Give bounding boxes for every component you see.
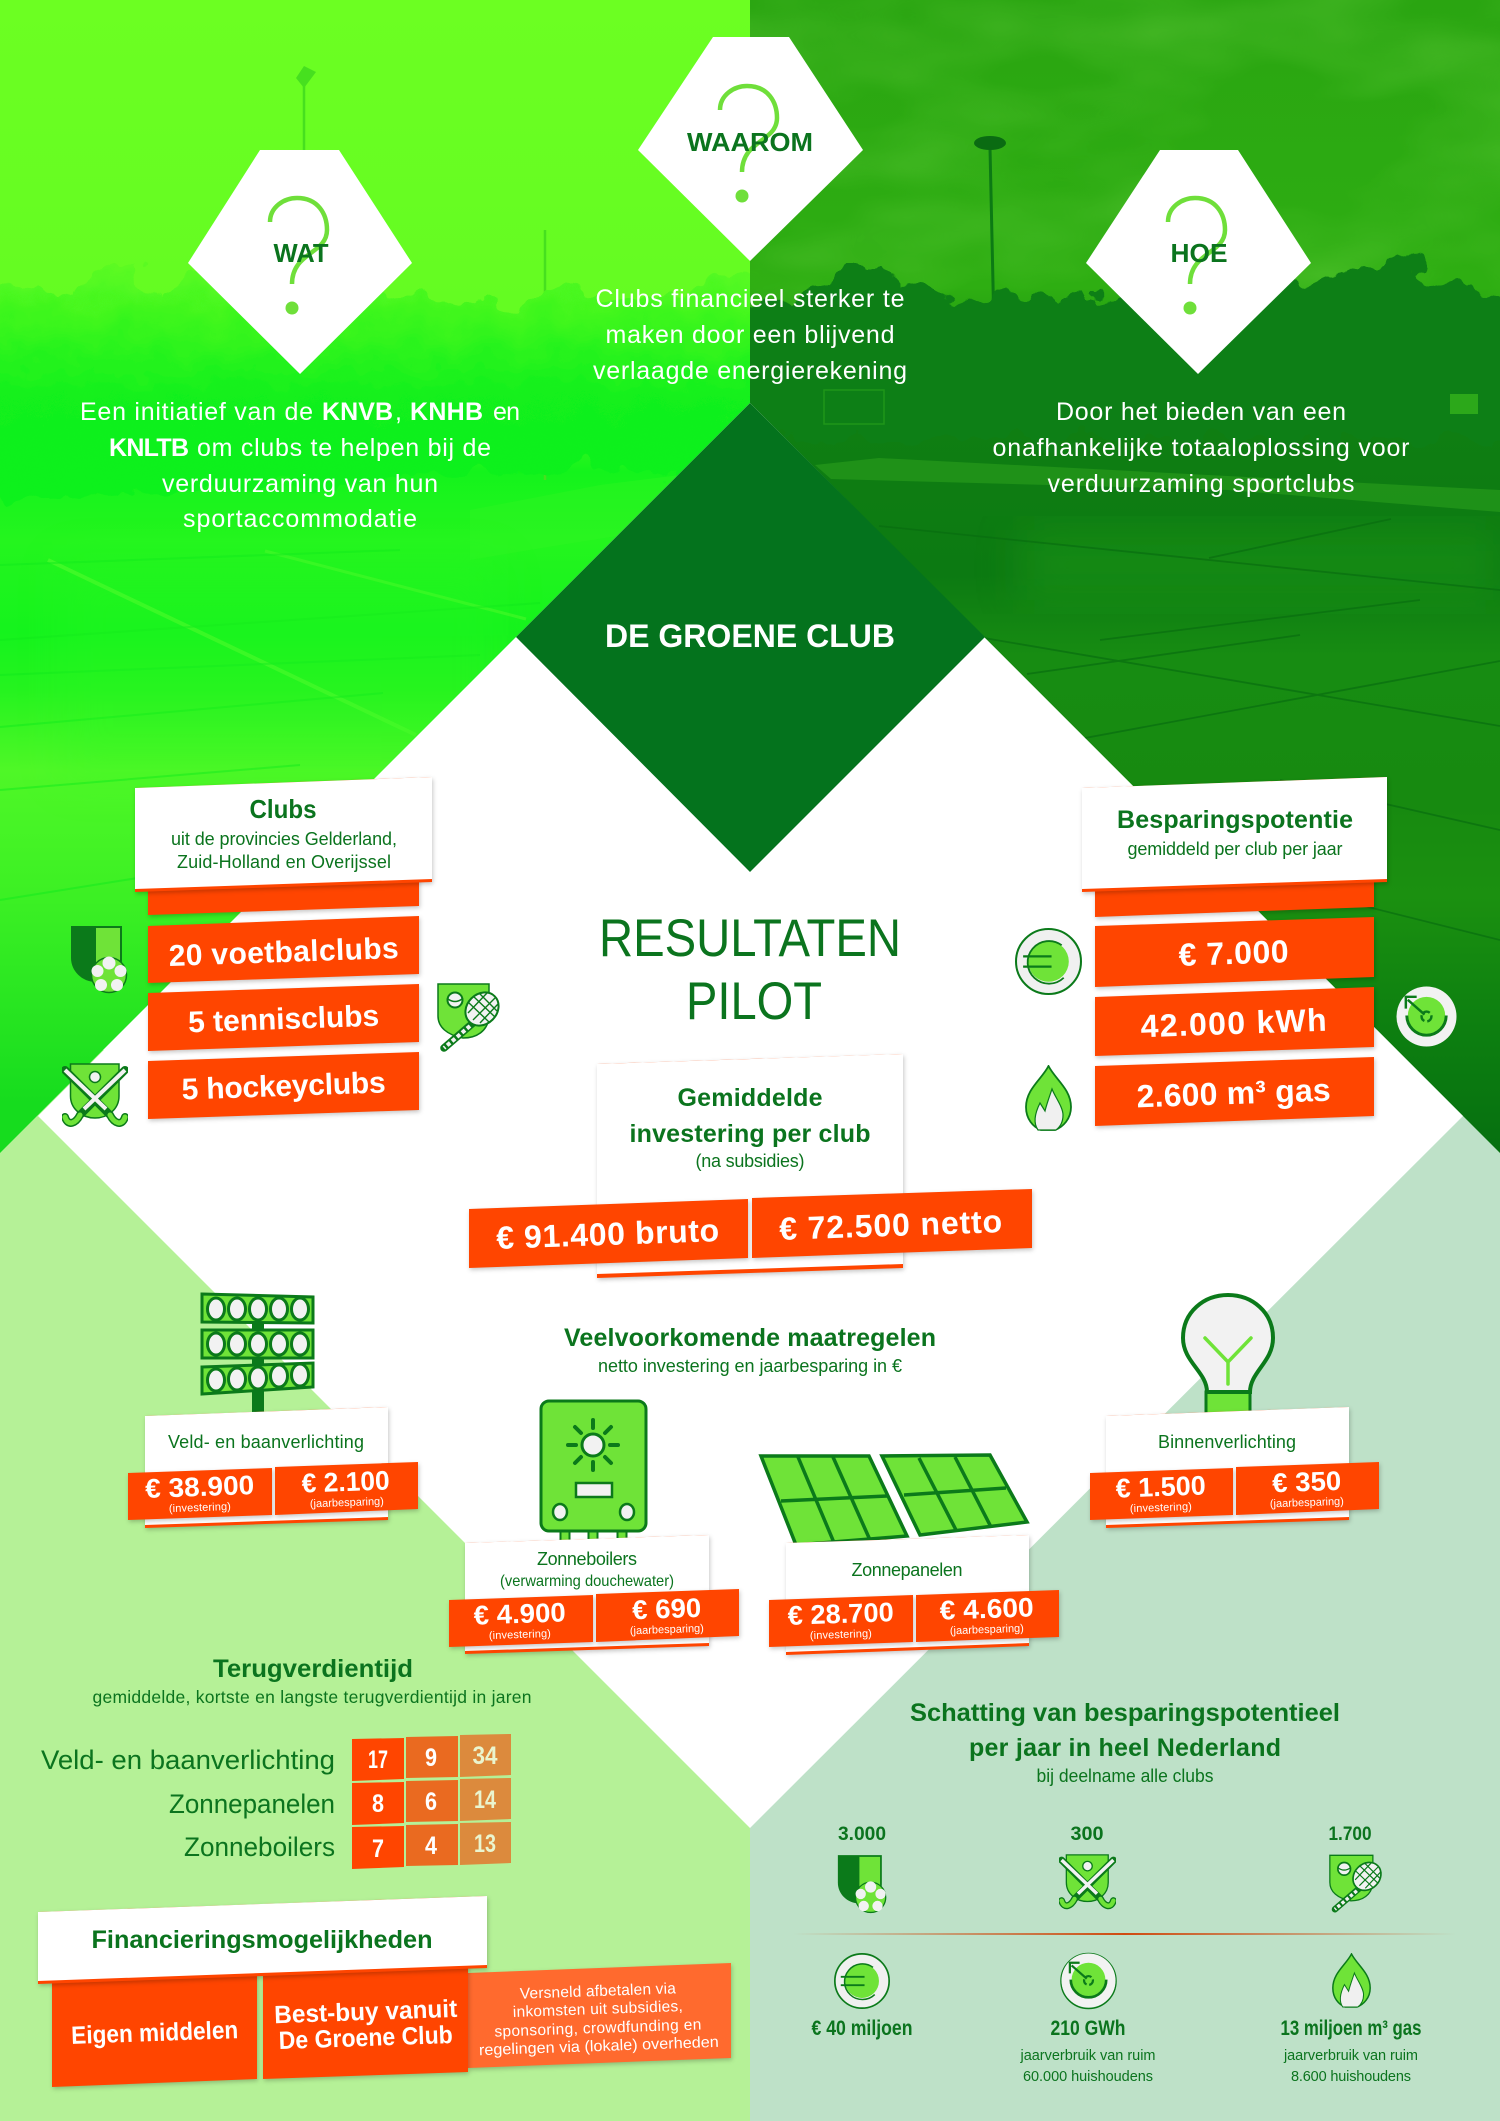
- table: 34: [472, 1742, 498, 1770]
- text: hoe: Door het bieden van een: [1056, 398, 1346, 426]
- badge: HOE: HOE: [1170, 238, 1228, 268]
- icon: energy meter small: [1061, 1953, 1116, 2008]
- table: 14: [474, 1786, 496, 1814]
- value: jaarbesparing: € 4.600: [939, 1592, 1034, 1626]
- heading: per jaar in heel Nederland: [969, 1734, 1281, 1762]
- heading: Schatting van besparingspotentieel: [910, 1699, 1340, 1727]
- photo panel: right dark green: [730, 0, 1500, 1153]
- text: wat: KNVB: [322, 398, 393, 426]
- bar: tennisclubs: 5 tennisclubs: [188, 1000, 380, 1039]
- icon: energy meter: [1396, 986, 1457, 1047]
- card: investment: Gemiddelde: [678, 1084, 823, 1112]
- counts: 3.000: [838, 1824, 886, 1845]
- stat: kWh: jaarverbruik van ruim: [1020, 2048, 1156, 2064]
- value: jaarbesparing: [275, 1462, 418, 1515]
- bar: hockeyclubs: [148, 1052, 419, 1119]
- badge: HOE: [1086, 150, 1311, 374]
- text: wat: sportaccommodatie: [183, 505, 417, 533]
- heading: [92, 1655, 532, 1707]
- bar: hockeyclubs: 5 hockeyclubs: [181, 1066, 386, 1107]
- value: investering: € 38.900: [145, 1470, 255, 1504]
- card: veld- en baanverlichting: [128, 1407, 418, 1528]
- text: wat: [80, 398, 520, 533]
- text: wat: verduurzaming van hun: [162, 470, 438, 498]
- badge: WAT: WAT: [274, 238, 329, 268]
- bar: kWh saving: 42.000 kWh: [1140, 1002, 1327, 1044]
- icon: euro coin small: [835, 1954, 889, 2008]
- heading: bij deelname alle clubs: [1036, 1766, 1214, 1786]
- bar: euro saving: € 7.000: [1178, 933, 1289, 973]
- table: 8: [372, 1790, 384, 1818]
- value: investering: € 4.900: [473, 1597, 566, 1631]
- text: wat: en: [493, 398, 520, 426]
- value: jaarbesparing: [1236, 1462, 1379, 1515]
- card: zonnepanelen: [769, 1535, 1059, 1655]
- text: waarom: verlaagde energierekening: [593, 357, 907, 385]
- text: hoe: verduurzaming sportclubs: [1048, 470, 1354, 498]
- badge: WAT: [188, 150, 412, 374]
- stat: kWh: [1020, 2017, 1156, 2085]
- card: binnenverlichting: [1090, 1407, 1379, 1528]
- heading: [910, 1699, 1340, 1786]
- card: zonneboilers: Zonneboilers: [537, 1549, 637, 1569]
- value: investering: [449, 1595, 593, 1647]
- bar: gas saving: [1095, 1057, 1374, 1126]
- stat: gas: 8.600 huishoudens: [1291, 2069, 1411, 2085]
- box: versneld afbetalen: [468, 1963, 731, 2068]
- heading: resultaten pilot: [599, 909, 901, 1031]
- icon: tennis shield small: [1330, 1855, 1387, 1909]
- heading: resultaten pilot: RESULTATEN: [599, 909, 901, 968]
- bar: euro saving: [1095, 917, 1374, 987]
- panel: clubs: [135, 777, 432, 1119]
- card: investment: (na subsidies): [696, 1151, 804, 1171]
- icon: hockey shield small: [1062, 1855, 1113, 1906]
- stat: kWh: 60.000 huishoudens: [1023, 2069, 1153, 2085]
- value: investering: (investering): [1130, 1501, 1192, 1515]
- card: binnenverlichting: Binnenverlichting: [1158, 1432, 1296, 1452]
- value: jaarbesparing: (jaarbesparing): [310, 1496, 384, 1510]
- icon: gas flame small: [1333, 1954, 1370, 2007]
- box: eigen middelen: [52, 1972, 257, 2087]
- stat: gas: [1280, 2017, 1422, 2085]
- heading: Terugverdientijd: [213, 1655, 413, 1683]
- icon: solar boiler: [541, 1401, 646, 1542]
- bar: kWh saving: [1095, 987, 1374, 1056]
- card: zonnepanelen: Zonnepanelen: [852, 1560, 962, 1580]
- icon: gas flame: [1026, 1066, 1071, 1130]
- row labels: Veld- en baanverlichting: [41, 1745, 335, 1775]
- text: waarom: [593, 285, 907, 385]
- icon: euro coin: [1016, 929, 1081, 994]
- heading: veelvoorkomende maatregelen: Veelvoorkomende maatregelen: [564, 1324, 936, 1352]
- box: best-buy: De Groene Club: [278, 2021, 453, 2055]
- text: wat: Een initiatief van de: [80, 398, 313, 426]
- bar: gas saving: 2.600 m³ gas: [1136, 1072, 1331, 1114]
- box: best-buy: [263, 1964, 468, 2079]
- bar: voetbalclubs: 20 voetbalclubs: [168, 932, 399, 973]
- text: waarom: Clubs financieel sterker te: [596, 285, 904, 313]
- icon: tennis shield: [438, 984, 505, 1048]
- heading: resultaten pilot: PILOT: [686, 972, 822, 1031]
- card: clubs heading: uit de provincies Gelderland,: [171, 829, 397, 849]
- stat: gas: jaarverbruik van ruim: [1283, 2048, 1418, 2064]
- value: investering: € 28.700: [787, 1597, 894, 1631]
- value: jaarbesparing: € 350: [1272, 1466, 1342, 1498]
- value: jaarbesparing: [916, 1590, 1059, 1642]
- value: investering: (investering): [810, 1628, 872, 1642]
- table: 6: [425, 1788, 437, 1816]
- row labels: Zonneboilers: [184, 1832, 335, 1862]
- counts: 300: [1070, 1824, 1104, 1845]
- bar: tennisclubs: [148, 984, 419, 1051]
- icon: football shield small: [838, 1855, 886, 1912]
- row labels: Zonnepanelen: [169, 1789, 335, 1819]
- card: zonneboilers: (verwarming douchewater): [500, 1573, 674, 1590]
- bar: bruto: € 91.400 bruto: [496, 1212, 720, 1256]
- stat: kWh: 210 GWh: [1050, 2017, 1126, 2040]
- bar: netto: € 72.500 netto: [779, 1203, 1003, 1247]
- value: jaarbesparing: [596, 1589, 739, 1642]
- table: [352, 1734, 511, 1869]
- card: financiering heading: Financieringsmogelijkheden: [92, 1926, 432, 1954]
- text: hoe: [992, 398, 1410, 498]
- panel: besparingspotentie: [1082, 777, 1387, 1126]
- text: wat: ,: [395, 398, 402, 426]
- bar: voetbalclubs: [148, 916, 419, 983]
- table: 17: [368, 1746, 388, 1774]
- value: jaarbesparing: (jaarbesparing): [630, 1623, 704, 1637]
- text: wat: KNHB: [410, 398, 483, 426]
- text: wat: KNLTB: [109, 434, 189, 462]
- text: hoe: onafhankelijke totaaloplossing voor: [992, 434, 1410, 462]
- value: investering: (investering): [489, 1628, 551, 1642]
- value: investering: [1090, 1468, 1233, 1520]
- panel: terugverdientijd: [41, 1655, 532, 1869]
- box: versneld afbetalen: inkomsten uit subsidies,: [513, 1998, 683, 2021]
- box: versneld afbetalen: Versneld afbetalen via: [520, 1980, 676, 2003]
- table: 13: [474, 1830, 496, 1858]
- box: versneld afbetalen: sponsoring, crowdfunding en: [494, 2016, 702, 2041]
- value: investering: € 1.500: [1115, 1470, 1206, 1504]
- card: besparing heading: [1082, 777, 1387, 892]
- value: investering: [128, 1468, 272, 1520]
- bottom right background: [750, 1050, 1500, 2121]
- card: clubs heading: Clubs: [250, 794, 316, 824]
- table: 4: [425, 1832, 437, 1860]
- box: best-buy: Best-buy vanuit: [274, 1995, 458, 2029]
- box: versneld afbetalen: regelingen via (lokale) overheden: [479, 2034, 719, 2059]
- icon: stadium floodlights: [202, 1294, 313, 1413]
- heading: gemiddelde, kortste en langste terugverdientijd in jaren: [92, 1687, 532, 1707]
- card: clubs heading: [135, 777, 432, 892]
- card: financiering heading: [38, 1896, 487, 1984]
- counts: 1.700: [1328, 1824, 1372, 1845]
- panel: gemiddelde investering: [469, 1054, 1032, 1278]
- text: waarom: maken door een blijvend: [606, 321, 894, 349]
- bar: bruto: [469, 1199, 748, 1268]
- card: investment: investering per club: [630, 1120, 870, 1148]
- value: jaarbesparing: € 690: [632, 1593, 702, 1625]
- value: investering: (investering): [169, 1501, 231, 1515]
- bar: netto: [752, 1189, 1032, 1258]
- row labels: [41, 1745, 335, 1862]
- panel: financieringsmogelijkheden: [38, 1896, 731, 2087]
- title diamond: De Groene Club: DE GROENE CLUB: [605, 618, 895, 654]
- stat: gas: 13 miljoen m³ gas: [1280, 2017, 1422, 2040]
- white centre diamond: [38, 403, 1463, 1828]
- icon: light bulb: [1183, 1295, 1273, 1414]
- card: clubs heading: Zuid-Holland en Overijssel: [177, 852, 391, 872]
- counts: [838, 1824, 1372, 1845]
- table: 9: [425, 1744, 437, 1772]
- stat: euro: € 40 miljoen: [812, 2017, 912, 2040]
- photo panel: left bright green: [0, 0, 770, 1153]
- bottom left background: [0, 1050, 750, 2121]
- orange bar behind card: [148, 870, 419, 915]
- heading: veelvoorkomende maatregelen: [564, 1324, 936, 1376]
- table: 7: [372, 1835, 384, 1863]
- badge: WAAROM: [638, 37, 863, 261]
- value: investering: [769, 1595, 913, 1647]
- text: wat: om clubs te helpen bij de: [197, 434, 491, 462]
- card: zonneboilers: [449, 1535, 739, 1654]
- card: veld- en baanverlichting: Veld- en baanverlichting: [168, 1432, 364, 1452]
- icon: hockey shield: [65, 1064, 125, 1123]
- box: eigen middelen: Eigen middelen: [71, 2016, 239, 2050]
- value: jaarbesparing: € 2.100: [301, 1465, 390, 1499]
- card: besparing heading: Besparingspotentie: [1117, 806, 1353, 834]
- card: besparing heading: gemiddeld per club per jaar: [1128, 839, 1342, 859]
- value: jaarbesparing: (jaarbesparing): [950, 1623, 1024, 1637]
- orange bar behind card: [1095, 870, 1374, 917]
- card: investment: [597, 1054, 903, 1278]
- value: jaarbesparing: (jaarbesparing): [1270, 1496, 1344, 1510]
- panel: schatting nederland: [793, 1699, 1456, 2085]
- title diamond: De Groene Club: [516, 403, 985, 872]
- heading: veelvoorkomende maatregelen: netto investering en jaarbesparing in €: [598, 1356, 902, 1376]
- icon: solar panels: [761, 1455, 1027, 1545]
- badge: WAAROM: WAAROM: [687, 127, 813, 157]
- icon: football shield: [71, 926, 126, 992]
